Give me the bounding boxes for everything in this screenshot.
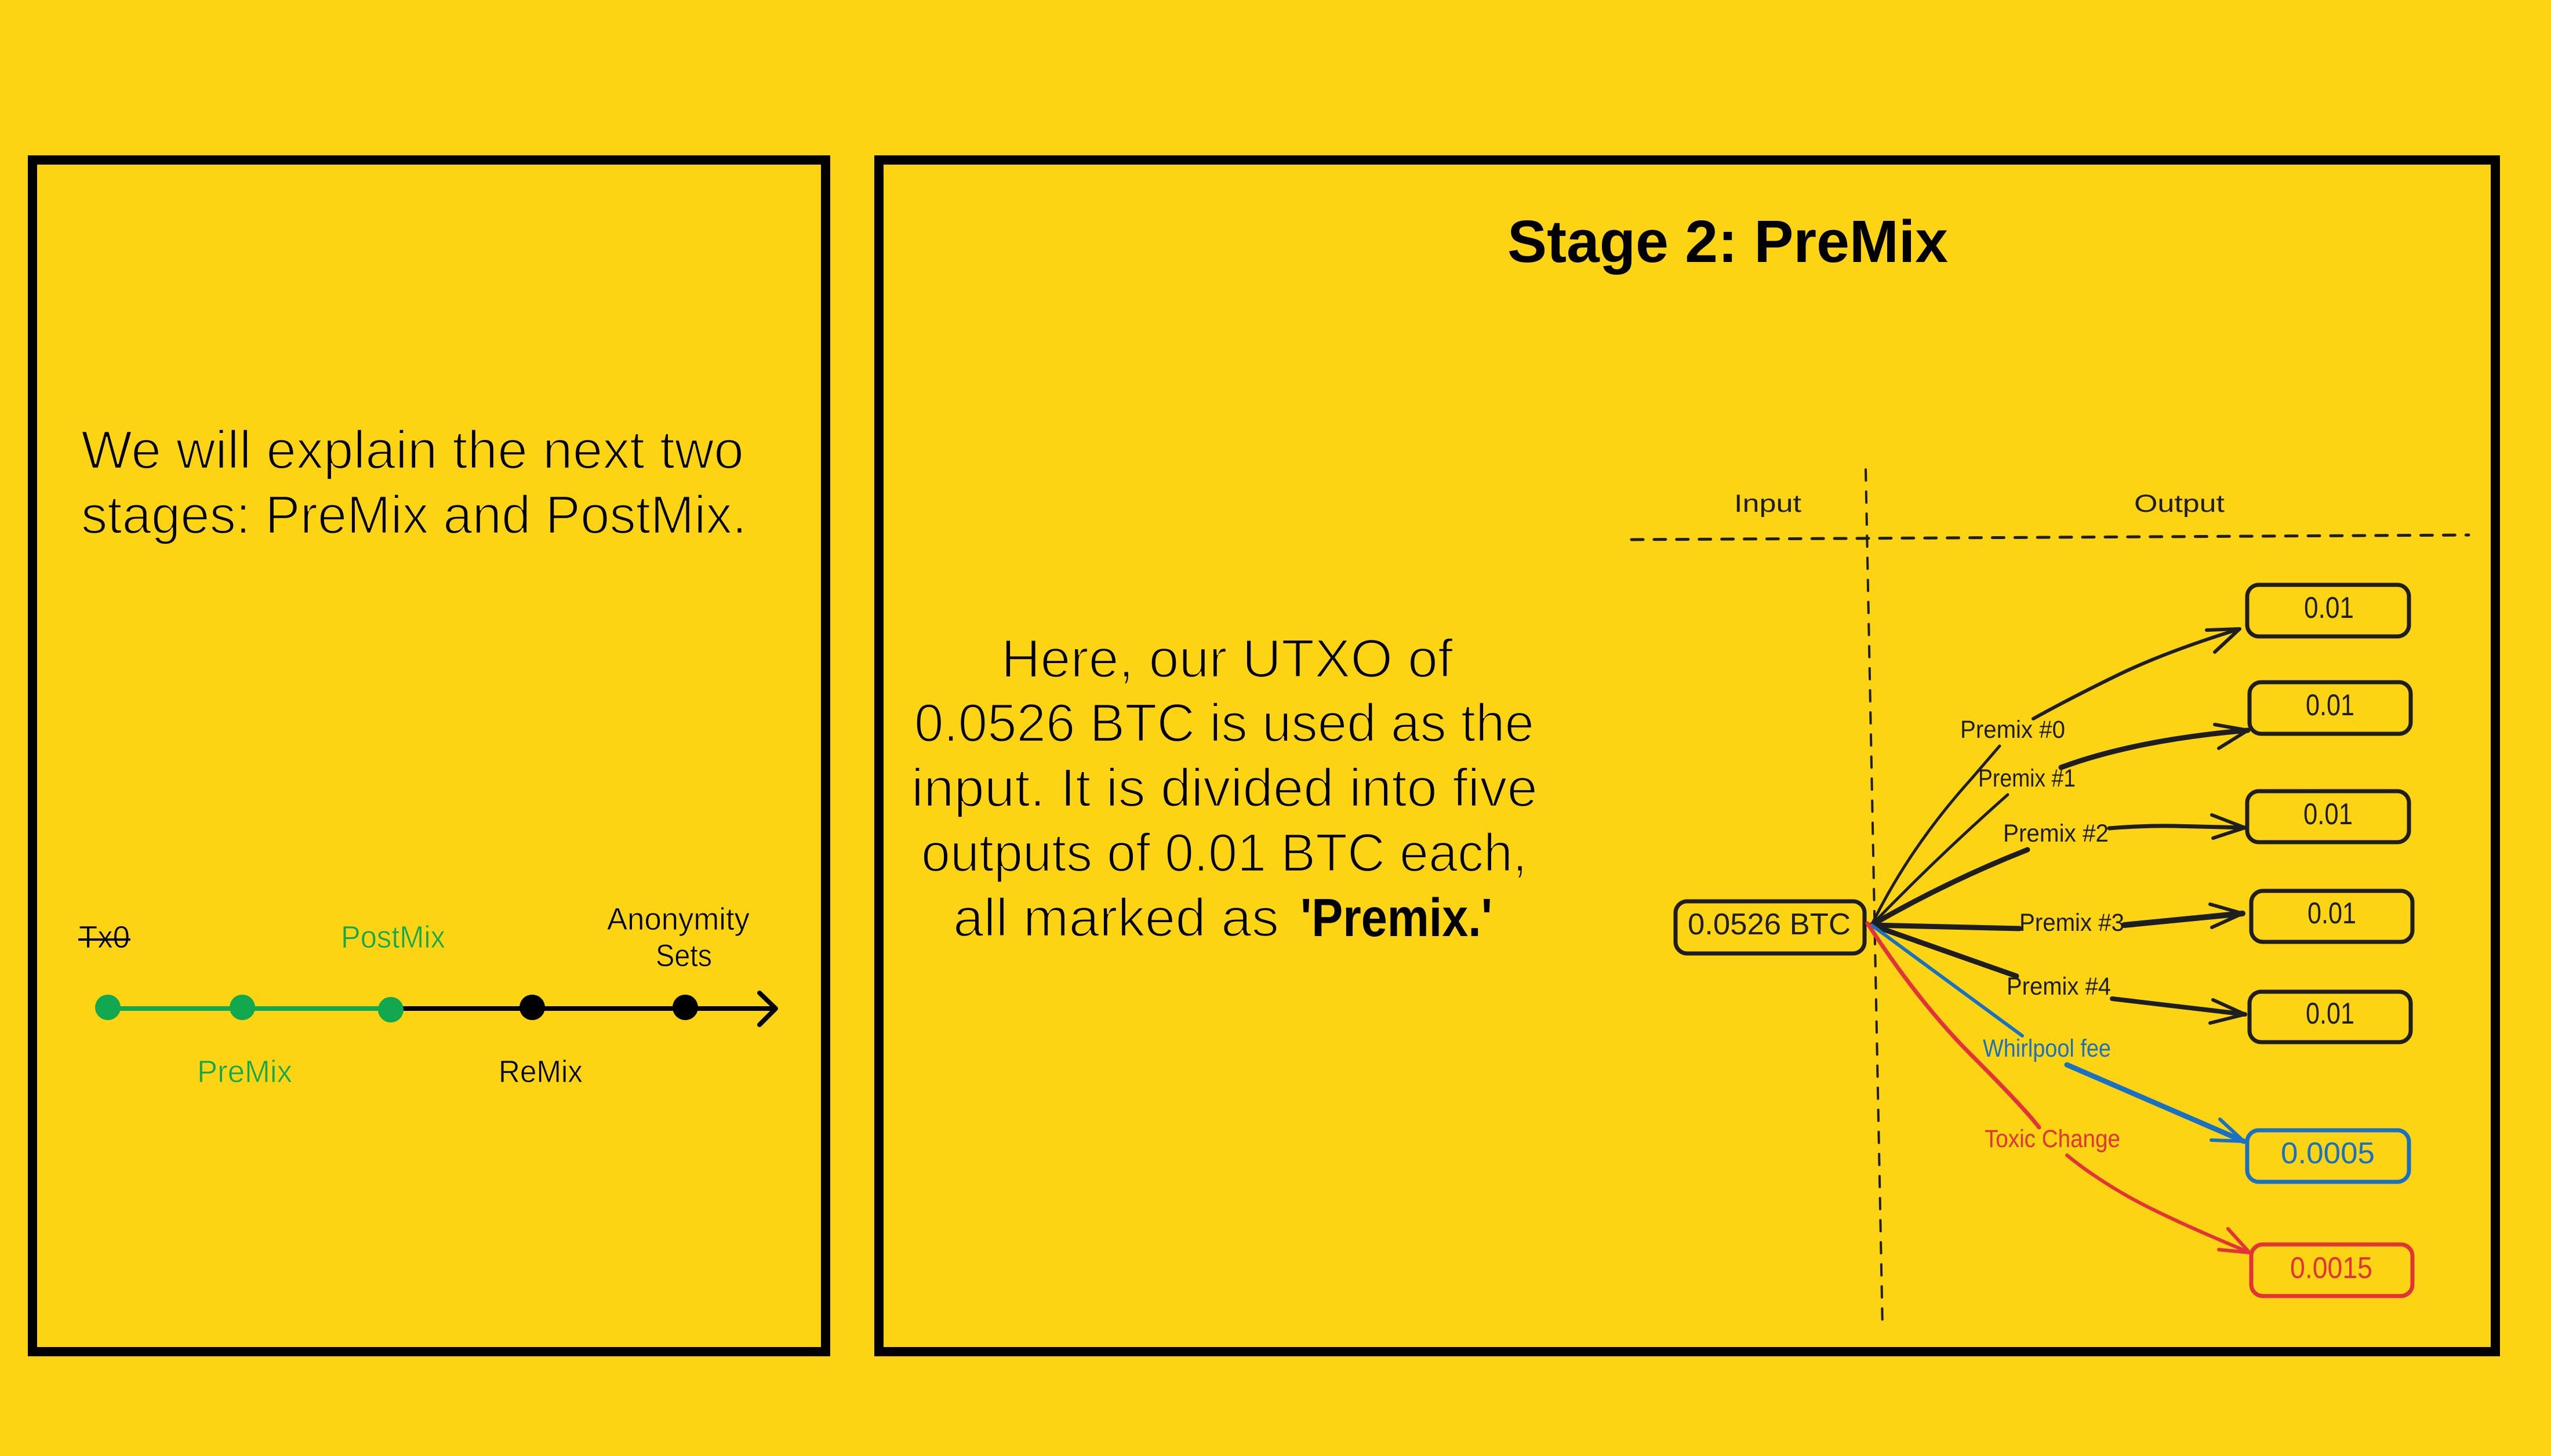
label: ReMix: ReMix: [499, 1054, 583, 1089]
label: Premix #4: Premix #4: [2007, 973, 2111, 1000]
timeline chart: [95, 993, 776, 1025]
axis: dashed dividers: [1631, 469, 2469, 1328]
output box 2: 0.01: [2306, 689, 2354, 722]
text block: next two stages: stages: PreMix and PostMix.: [81, 485, 747, 545]
label: Anonymity Sets: Anonymity: [607, 902, 750, 937]
arrow: toxic change: [1867, 923, 2250, 1253]
heading: Output: Output: [2134, 490, 2225, 518]
label: Whirlpool fee: Whirlpool fee: [1983, 1035, 2111, 1062]
output box 5: [2250, 992, 2411, 1042]
output box 5: 0.01: [2306, 997, 2354, 1031]
heading: Input: Input: [1734, 490, 1801, 518]
label: Anonymity Sets: [607, 902, 750, 973]
text block: explanation: Here, our UTXO of: [1001, 628, 1453, 689]
diagram: premix transaction: [1631, 469, 2469, 1328]
text block: next two stages: [81, 420, 747, 545]
text block: next two stages: We will explain the next two: [81, 420, 744, 480]
arrow: premix 1: [1872, 725, 2248, 925]
label: Premix #0: Premix #0: [1960, 716, 2065, 744]
output box 1: [2247, 585, 2409, 636]
label: PostMix: PostMix: [341, 920, 445, 955]
input box: 0.0526 BTC: [1688, 908, 1851, 941]
input box: [1676, 901, 1865, 953]
output box 1: 0.01: [2304, 591, 2354, 625]
output box: toxic change: [2251, 1244, 2412, 1296]
text block: explanation: 'Premix.': [1300, 887, 1492, 948]
output box 3: 0.01: [2303, 798, 2353, 831]
output box 4: 0.01: [2307, 897, 2356, 930]
arrow: premix 2: [1872, 815, 2245, 925]
label: Anonymity Sets: Sets: [656, 938, 712, 973]
label: Toxic Change: Toxic Change: [1985, 1125, 2120, 1153]
label: Premix #3: Premix #3: [2019, 909, 2124, 937]
arrow: premix 4: [1872, 925, 2245, 1023]
output box 2: [2250, 682, 2411, 734]
text block: explanation: outputs of 0.01 BTC each,: [921, 822, 1527, 883]
text block: explanation: input. It is divided into five: [911, 758, 1538, 818]
arrow: premix 0: [1872, 629, 2240, 925]
label: PreMix: PreMix: [197, 1054, 292, 1089]
panel: stage 2 premix: [879, 160, 2495, 1352]
text block: explanation: all marked as: [953, 887, 1279, 948]
arrow: premix 3: [1872, 904, 2243, 929]
title: Stage 2: PreMix: [1507, 208, 1948, 275]
label: Premix #2: Premix #2: [2003, 820, 2109, 847]
text block: explanation: 0.0526 BTC is used as the: [914, 693, 1534, 753]
arrow: whirlpool fee: [1872, 925, 2244, 1141]
output box 4: [2251, 891, 2412, 942]
label: Tx0 struck through: Tx0: [79, 920, 130, 955]
output box 3: [2247, 791, 2409, 842]
output box: whirlpool fee: [2247, 1130, 2409, 1182]
output box: toxic change: 0.0015: [2290, 1251, 2372, 1285]
panel: timeline overview: [32, 160, 826, 1352]
output box: whirlpool fee: 0.0005: [2281, 1137, 2375, 1170]
label: Premix #1: Premix #1: [1978, 765, 2076, 792]
text block: explanation: [911, 628, 1538, 948]
